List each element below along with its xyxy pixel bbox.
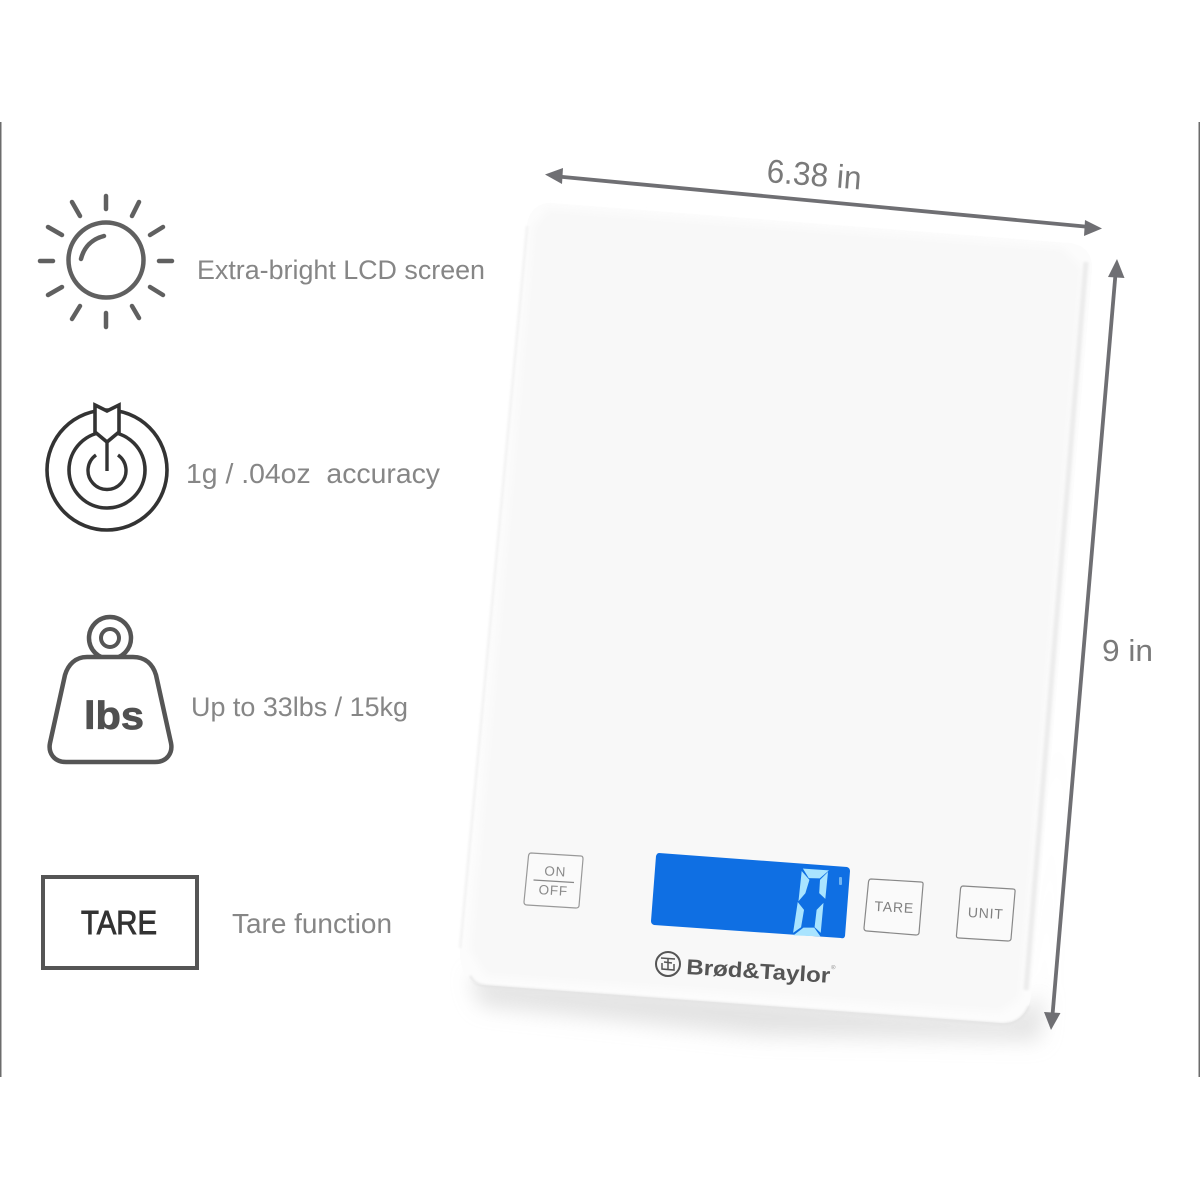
scale body: [460, 203, 1092, 1023]
button: unit: [956, 886, 1015, 941]
height dimension arrow: [1044, 259, 1124, 1030]
lcd digit zero: [794, 869, 828, 936]
scale bottom edge: [470, 976, 1029, 1024]
text: accuracy feature: 1g / .04oz accuracy: [186, 458, 440, 489]
button: tare: [864, 879, 923, 935]
brand logo: [656, 952, 836, 988]
scale left edge highlight: [460, 226, 527, 948]
text: tare feature: Tare function: [232, 908, 392, 939]
width label: 6.38 in: [765, 152, 863, 196]
button: unit: UNIT: [967, 904, 1004, 922]
icon: tare box: [43, 877, 197, 968]
scale glass surface: [470, 209, 1082, 1012]
scale shadow: [470, 700, 1062, 1040]
button: on/off: ON: [544, 863, 567, 880]
height label: 9 in: [1102, 633, 1153, 668]
text: capacity feature: Up to 33lbs / 15kg: [191, 692, 408, 722]
width dimension arrow: [545, 168, 1102, 236]
kitchen scale: [460, 203, 1092, 1040]
brand logo: ®: [831, 964, 836, 971]
icon: weight: [50, 617, 171, 762]
icon: tare box: TARE: [81, 904, 157, 941]
button: on/off: OFF: [538, 882, 568, 899]
lcd display: [651, 853, 850, 938]
text: LCD screen feature: Extra-bright LCD screen: [197, 255, 485, 285]
icon: sun: [40, 196, 172, 327]
scale right edge band: [1026, 262, 1086, 990]
button: on/off: [524, 853, 583, 908]
button: tare: TARE: [874, 898, 914, 916]
brand logo: Brød&Taylor: [686, 955, 832, 988]
icon: target with arrow: [47, 405, 167, 530]
icon: weight: lbs: [84, 695, 144, 738]
